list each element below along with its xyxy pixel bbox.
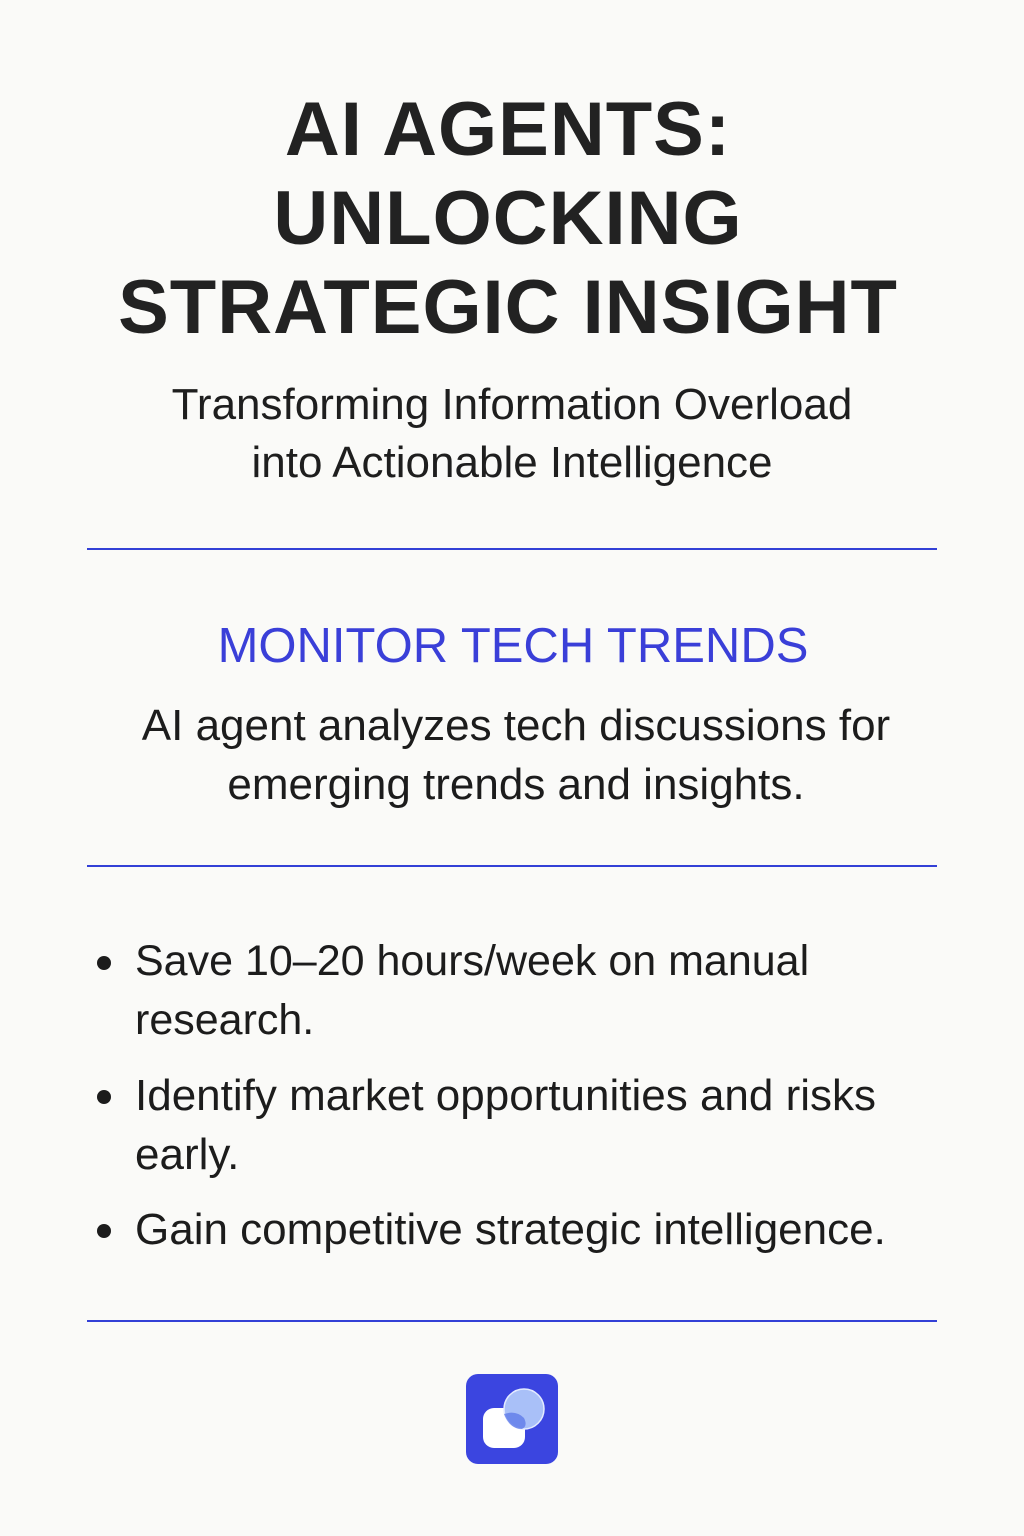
section description: emerging trends and insights. [227,760,805,809]
bullet 1 [97,937,809,1044]
bullet 2 [97,1071,876,1179]
title: AI AGENTS: [285,87,731,172]
bullet 2: early. [135,1130,239,1179]
section heading: MONITOR TECH TRENDS [218,619,808,673]
bullet 1: Save 10–20 hours/week on manual [135,937,809,985]
title: UNLOCKING [273,176,743,261]
bullet 3: Gain competitive strategic intelligence. [135,1205,886,1254]
title [118,87,898,350]
section description [142,701,890,809]
icon: logo [466,1374,558,1464]
section description: AI agent analyzes tech discussions for [142,701,890,750]
bullet list [97,937,886,1254]
title: STRATEGIC INSIGHT [118,265,898,350]
subtitle: into Actionable Intelligence [251,438,773,487]
bullet 2: Identify market opportunities and risks [135,1071,876,1120]
bullet 1: research. [135,996,314,1044]
subtitle: Transforming Information Overload [172,380,852,429]
subtitle [172,380,852,487]
